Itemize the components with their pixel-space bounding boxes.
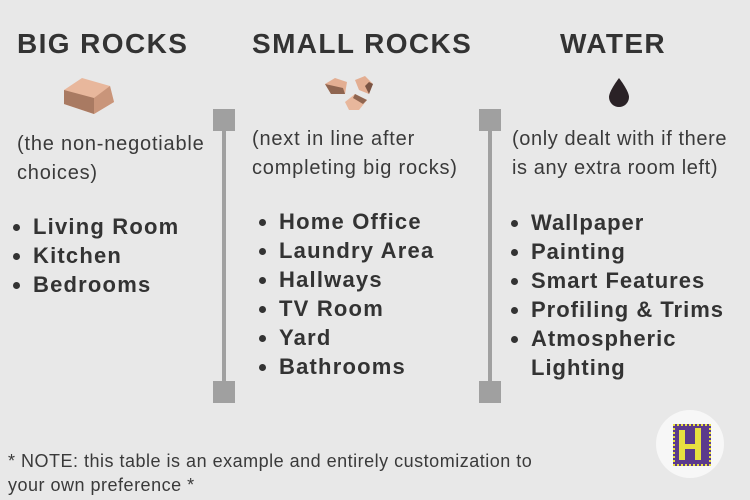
text: small rocks subtitle: completing big rocks) (252, 157, 458, 179)
list: small rocks: Yard (279, 325, 332, 350)
icon: big rock (64, 78, 114, 114)
heading: water: WATER (560, 28, 666, 59)
text: water subtitle (512, 128, 727, 179)
list: big rocks: Bedrooms (33, 272, 151, 297)
list: water: Profiling & Trims (531, 297, 724, 322)
list: big rocks: Living Room (33, 214, 179, 239)
divider 1 (213, 109, 235, 403)
text: water subtitle: (only dealt with if there (512, 128, 727, 150)
text: big rocks subtitle: (the non-negotiable (17, 133, 205, 155)
divider 2 (479, 109, 501, 403)
list: small rocks (259, 209, 434, 379)
list: water (511, 210, 724, 380)
logo (656, 410, 724, 478)
icon: small rocks (325, 76, 373, 110)
list: water: Painting (531, 239, 626, 264)
heading: big rocks: BIG ROCKS (17, 28, 188, 59)
list: big rocks: Kitchen (33, 243, 122, 268)
list: big rocks (13, 214, 179, 297)
list: small rocks: Laundry Area (279, 238, 434, 263)
text: big rocks subtitle (17, 133, 205, 184)
text: water subtitle: is any extra room left) (512, 157, 718, 179)
text: small rocks subtitle (252, 128, 458, 179)
list: small rocks: TV Room (279, 296, 384, 321)
note (8, 451, 532, 495)
list: water: Smart Features (531, 268, 705, 293)
note: your own preference * (8, 475, 195, 495)
heading: small rocks: SMALL ROCKS (252, 28, 472, 59)
list: small rocks: Home Office (279, 209, 422, 234)
text: big rocks subtitle: choices) (17, 162, 98, 184)
list: small rocks: Hallways (279, 267, 383, 292)
text: small rocks subtitle: (next in line after (252, 128, 415, 150)
icon: water drop (609, 78, 629, 107)
list: water: Lighting (531, 355, 626, 380)
list: water: Wallpaper (531, 210, 644, 235)
list: small rocks: Bathrooms (279, 354, 406, 379)
note: * NOTE: this table is an example and entirely customization to (8, 451, 532, 471)
list: water: Atmospheric (531, 326, 676, 351)
